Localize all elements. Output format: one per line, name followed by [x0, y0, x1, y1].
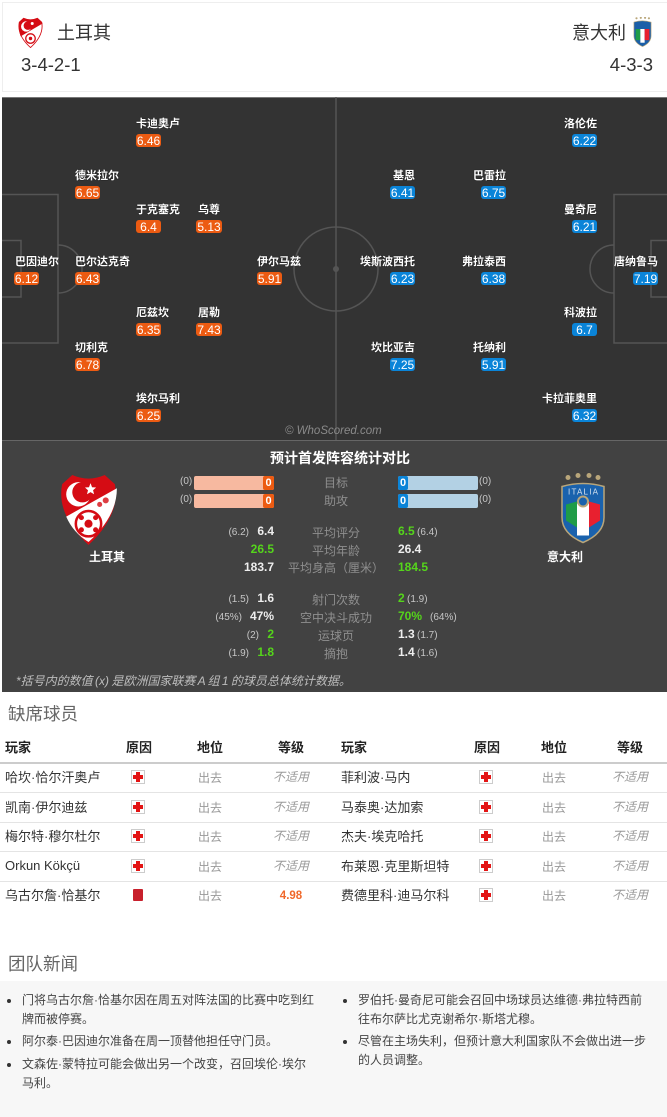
heading: team news: 团队新闻	[8, 954, 78, 974]
player: 巴雷拉: 巴雷拉	[473, 170, 506, 182]
news column: Italy: 的人员调整。	[358, 1052, 430, 1066]
player: 卡拉菲奥里: 6.32	[573, 409, 596, 423]
player: 埃尔马利: 6.25	[137, 409, 160, 423]
away goals bar: 0	[400, 477, 406, 489]
away assists bar	[398, 494, 491, 508]
player: 基恩: 基恩	[393, 170, 415, 182]
news column: Turkey: 门将乌古尔詹·恰基尔因在周五对阵法国的比赛中吃到红	[22, 993, 314, 1007]
player: 巴雷拉: 6.75	[482, 186, 505, 200]
stats rows: 47%	[250, 609, 274, 623]
table: missing players: 不适用	[612, 829, 648, 843]
stats rows: 1.4	[398, 645, 415, 659]
table: missing players: 不适用	[612, 888, 648, 902]
stats title: 预计首发阵容统计对比	[270, 450, 410, 466]
player: 德米拉尔	[75, 169, 119, 200]
table: missing players: 菲利波·马内	[341, 770, 410, 785]
news column: Italy: 往布尔萨比尤克谢希尔·斯塔尤穆。	[358, 1012, 542, 1026]
player: 厄兹坎	[136, 306, 169, 337]
icon: Italy crest	[561, 473, 605, 544]
player: 伊尔马兹: 伊尔马兹	[257, 256, 301, 268]
player: 于克塞克	[136, 203, 180, 234]
away goals bar	[398, 476, 491, 490]
player: 居勒: 7.43	[197, 323, 221, 337]
label goals: 目标	[324, 476, 348, 490]
stats rows: (1.5)	[228, 594, 249, 605]
stats rows: 射门次数	[312, 593, 360, 607]
player: 伊尔马兹: 5.91	[258, 272, 281, 286]
icon: Italy crest small	[634, 17, 652, 47]
table: missing players: 出去	[198, 830, 222, 844]
table: missing players: 梅尔特·穆尔杜尔	[5, 829, 100, 844]
stats rows: (1.9)	[407, 594, 428, 605]
stats rows: 2	[398, 591, 405, 605]
stats rows: 6.4	[257, 524, 274, 538]
stats rows: 平均年龄	[312, 544, 360, 558]
player: 弗拉泰西	[462, 255, 506, 286]
home team name: 土耳其	[57, 23, 111, 43]
player: 巴因迪尔	[14, 256, 59, 286]
player: 切利克	[75, 341, 108, 372]
home assists bar: 0	[265, 495, 272, 507]
player: 曼奇尼: 6.21	[573, 220, 596, 234]
icon: Italy crest: ITALIA	[568, 488, 599, 496]
watermark: © WhoScored.com	[285, 425, 382, 437]
player: 洛伦佐	[564, 117, 597, 148]
news column: Italy	[343, 993, 646, 1066]
player: 埃尔马利	[136, 392, 180, 423]
stats rows: (2)	[247, 630, 259, 641]
stats rows: 1.3	[398, 627, 415, 641]
player: 卡迪奥卢: 卡迪奥卢	[136, 118, 180, 130]
player: 埃斯波西托: 埃斯波西托	[360, 256, 415, 268]
player: 巴尔达克奇: 巴尔达克奇	[75, 256, 130, 268]
player: 居勒	[196, 306, 222, 337]
stats rows: 26.4	[398, 542, 421, 556]
player: 洛伦佐: 洛伦佐	[564, 118, 597, 130]
player: 于克塞克: 6.4	[140, 220, 157, 234]
player: 唐纳鲁马: 7.19	[634, 272, 657, 286]
stat: assists	[180, 494, 491, 508]
stats rows: 184.5	[398, 560, 428, 574]
home assists bar: (0)	[180, 494, 192, 505]
player: 坎比亚吉: 坎比亚吉	[371, 342, 415, 354]
player: 基恩: 6.41	[391, 186, 414, 200]
table: missing players: 出去	[198, 771, 222, 785]
table: missing players: 出去	[542, 889, 566, 903]
player: 洛伦佐: 6.22	[573, 134, 596, 148]
stat: goals	[180, 476, 491, 490]
player: 厄兹坎: 厄兹坎	[136, 307, 169, 319]
player: 伊尔马兹	[257, 256, 301, 286]
label assists: 助攻	[324, 494, 348, 508]
table: missing players: 原因	[474, 740, 500, 755]
player: 唐纳鲁马	[614, 255, 658, 286]
player: 乌尊: 乌尊	[198, 204, 220, 216]
stats rows: 空中决斗成功	[300, 611, 372, 625]
player: 弗拉泰西: 弗拉泰西	[462, 256, 506, 268]
player: 坎比亚吉	[371, 341, 415, 372]
table: missing players: 出去	[198, 801, 222, 815]
table: missing players: 出去	[542, 860, 566, 874]
table: missing players: 杰夫·埃克哈托	[341, 829, 423, 844]
table: missing players: 不适用	[273, 859, 309, 873]
player: 基恩	[390, 169, 415, 200]
stats rows: 平均评分	[312, 526, 360, 540]
home goals bar	[180, 476, 274, 490]
panel: lineup statistics comparison	[2, 441, 667, 692]
home goals bar: (0)	[180, 476, 192, 487]
table: missing players: 布莱恩·克里斯坦特	[341, 859, 449, 874]
news column: Italy: 罗伯托·曼奇尼可能会召回中场球员达维德·弗拉特西前	[358, 993, 642, 1007]
table: missing players: 出去	[198, 860, 222, 874]
news column: Turkey: 马利。	[22, 1076, 58, 1090]
table: missing players: Orkun Kökçü	[5, 858, 80, 873]
away team label: 意大利	[547, 550, 583, 564]
player: 曼奇尼: 曼奇尼	[564, 204, 597, 216]
home assists bar	[180, 494, 274, 508]
pitch markings	[2, 97, 667, 440]
away assists bar: (0)	[479, 494, 491, 505]
table: missing players: 不适用	[273, 770, 309, 784]
stats rows: (6.4)	[417, 527, 438, 538]
icon: Turkey crest small	[18, 18, 43, 48]
table: missing players: 不适用	[273, 829, 309, 843]
table: missing players: 不适用	[273, 800, 309, 814]
away assists bar: 0	[400, 495, 406, 507]
stats rows: (1.6)	[417, 648, 438, 659]
player: 卡迪奥卢	[136, 117, 180, 148]
table: missing players: 出去	[542, 771, 566, 785]
player: 卡迪奥卢: 6.46	[137, 134, 160, 148]
table: missing players	[0, 740, 667, 903]
player: 厄兹坎: 6.35	[137, 323, 160, 337]
player: 埃斯波西托	[360, 255, 415, 286]
player: 德米拉尔: 6.65	[76, 186, 99, 200]
stats rows: 70%	[398, 609, 422, 623]
player: 坎比亚吉: 7.25	[391, 358, 414, 372]
player: 科波拉: 科波拉	[564, 307, 597, 319]
stats rows	[215, 524, 457, 661]
player: 乌尊	[196, 203, 222, 234]
panel: pitch lineup	[2, 97, 667, 441]
player: 巴尔达克奇: 6.43	[76, 272, 99, 286]
table: missing players: 4.98	[280, 890, 302, 902]
player: 卡拉菲奥里	[542, 392, 597, 423]
stats rows: 1.6	[257, 591, 274, 605]
news column: Turkey	[7, 993, 314, 1090]
player: 巴尔达克奇	[75, 255, 130, 286]
home team label: 土耳其	[89, 550, 125, 564]
player: 居勒: 居勒	[198, 307, 220, 319]
table: missing players: 地位	[197, 740, 223, 755]
table: missing players: 费德里科·迪马尔科	[341, 888, 449, 903]
panel: team news	[0, 981, 667, 1117]
stats rows: 平均身高（厘米）	[288, 561, 384, 575]
footnote: *括号内的数值 (x) 是欧洲国家联赛 A 组 1 的球员总体统计数据。	[16, 674, 351, 688]
table: missing players: 出去	[542, 830, 566, 844]
stats rows: 运球页	[318, 629, 354, 643]
table: missing players: 哈坎·恰尔汗奥卢	[5, 770, 100, 785]
player: 埃斯波西托: 6.23	[391, 272, 414, 286]
stats rows: (45%)	[215, 612, 242, 623]
table: missing players: 不适用	[612, 800, 648, 814]
away team name: 意大利	[572, 23, 626, 43]
table: missing players: 玩家	[341, 740, 367, 755]
away goals bar: (0)	[479, 476, 491, 487]
player: 巴雷拉	[473, 169, 506, 200]
stats rows: 183.7	[244, 560, 274, 574]
stats rows: 26.5	[251, 542, 274, 556]
player: 唐纳鲁马: 唐纳鲁马	[614, 256, 658, 268]
player: 托纳利: 5.91	[482, 358, 505, 372]
table: missing players: 等级	[617, 740, 643, 755]
icon: Turkey crest	[61, 475, 117, 545]
table: missing players: 原因	[126, 740, 152, 755]
player: 切利克: 6.78	[76, 358, 99, 372]
player: 切利克: 切利克	[75, 342, 108, 354]
player: 德米拉尔: 德米拉尔	[75, 170, 119, 182]
stats rows: (1.9)	[228, 648, 249, 659]
heading: missing players: 缺席球员	[8, 704, 78, 724]
header: team names and formations	[2, 2, 667, 92]
player: 科波拉: 6.7	[576, 323, 593, 337]
stats rows: (6.2)	[228, 527, 249, 538]
news column: Turkey: 牌而被停赛。	[22, 1012, 94, 1026]
player: 巴因迪尔: 巴因迪尔	[15, 256, 59, 268]
player: 科波拉	[564, 306, 597, 337]
news column: Turkey: 文森佐·蒙特拉可能会做出另一个改变，召回埃伦·埃尔	[22, 1057, 306, 1071]
stats rows: (1.7)	[417, 630, 438, 641]
table: missing players: 乌古尔詹·恰基尔	[5, 888, 100, 903]
stats rows: 2	[267, 627, 274, 641]
stats rows: 1.8	[257, 645, 274, 659]
news column: Turkey: 阿尔泰·巴因迪尔准备在周一顶替他担任守门员。	[22, 1034, 278, 1048]
stats rows: (64%)	[430, 612, 457, 623]
player: 托纳利	[473, 341, 506, 372]
player: 于克塞克: 于克塞克	[136, 204, 180, 216]
table: missing players: 凯南·伊尔迪兹	[5, 800, 87, 815]
news column: Italy: 尽管在主场失利，但预计意大利国家队不会做出进一步	[358, 1034, 646, 1048]
table: missing players: 出去	[198, 889, 222, 903]
stats rows: 摘抱	[324, 647, 348, 661]
player: 曼奇尼	[564, 203, 597, 234]
player: 乌尊: 5.13	[197, 220, 221, 234]
player: 埃尔马利: 埃尔马利	[136, 393, 180, 405]
table: missing players: 地位	[541, 740, 567, 755]
home goals bar: 0	[265, 477, 272, 489]
player: 托纳利: 托纳利	[473, 342, 506, 354]
table: missing players: 出去	[542, 801, 566, 815]
stats rows: 6.5	[398, 524, 415, 538]
player: 卡拉菲奥里: 卡拉菲奥里	[542, 393, 597, 405]
table: missing players: 等级	[278, 740, 304, 755]
away formation: 4-3-3	[610, 54, 653, 75]
players	[14, 117, 658, 437]
table: missing players: 不适用	[612, 770, 648, 784]
player: 巴因迪尔: 6.12	[15, 272, 38, 286]
home formation: 3-4-2-1	[21, 54, 81, 75]
player: 弗拉泰西: 6.38	[482, 272, 505, 286]
table: missing players: 玩家	[5, 740, 31, 755]
table: missing players: 马泰奥·达加索	[341, 800, 423, 815]
table: missing players: 不适用	[612, 859, 648, 873]
